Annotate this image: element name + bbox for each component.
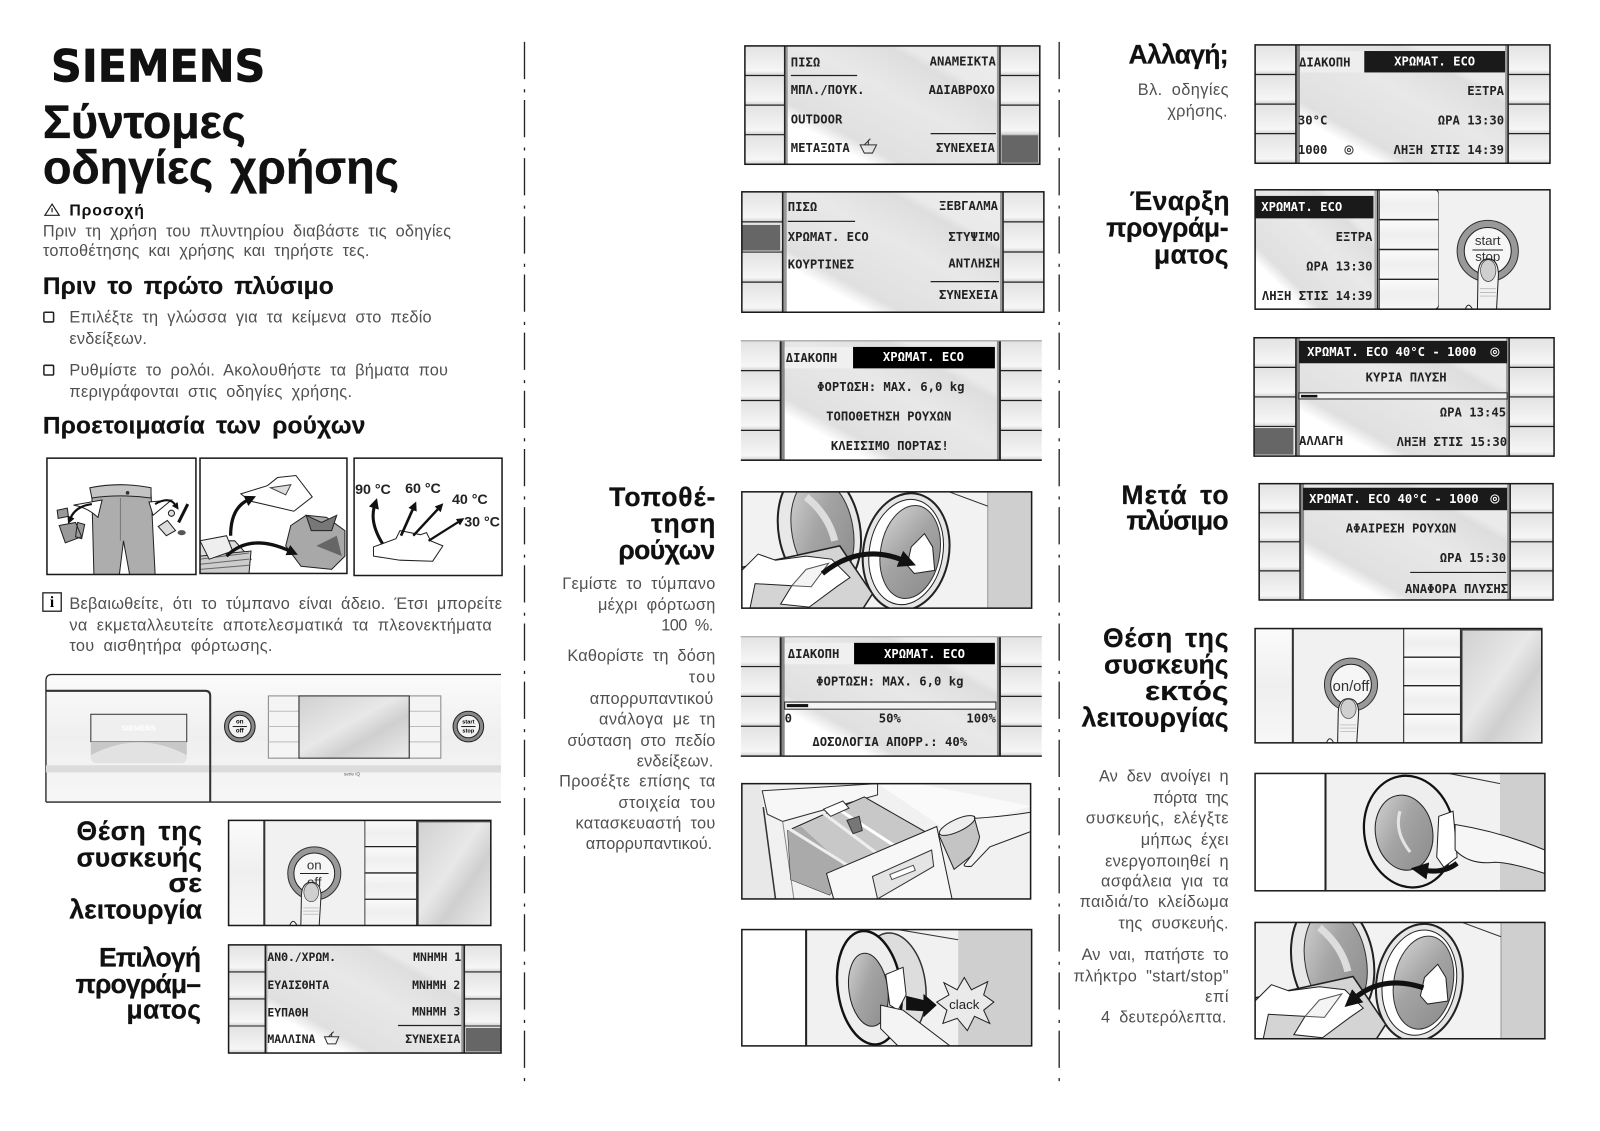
display panel: detergent dosage: 50% xyxy=(879,711,901,725)
icon: warning triangle xyxy=(45,204,59,215)
warning block: Πριν τη χρήση του πλυντηρίου διαβάστε τις οδηγίες xyxy=(43,223,451,241)
text: loading and detergent instructions: ενδείξεων. xyxy=(637,752,713,770)
logo: Siemens: SIEMENS xyxy=(51,40,265,93)
heading: after washing: Μετά το xyxy=(1121,480,1229,510)
display panel: remove clothes: ΑΝΑΦΟΡΑ ΠΛΥΣΗΣ xyxy=(1405,582,1508,596)
heading: loading clothes xyxy=(609,482,715,565)
display panel: load info: ΧΡΩΜΑΤ. ECO xyxy=(883,350,964,364)
icon: spin xyxy=(1491,348,1499,356)
icon: wash basket xyxy=(860,139,877,153)
display panel: detergent dosage: ΦΟΡΤΩΣΗ: MAX. 6,0 kg xyxy=(816,675,963,689)
heading: change: Αλλαγή; xyxy=(1129,39,1229,69)
warning block: τοποθέτησης και χρήσης και τηρήστε τες. xyxy=(43,242,369,260)
heading: switch appliance on: Θέση της xyxy=(77,816,202,846)
heading: switch appliance on: σε xyxy=(168,868,202,898)
heading: start program: ματος xyxy=(1154,239,1229,269)
illustration: closing door, clack xyxy=(742,927,1032,1049)
text: door does not open: ενεργοποιηθεί η xyxy=(1105,852,1229,870)
display panel: program menu 2: ΣΥΝΕΧΕΙΑ xyxy=(936,141,996,155)
heading: loading clothes: ρούχων xyxy=(618,535,715,565)
text: door does not open xyxy=(1073,768,1229,1026)
display panel: main wash progress xyxy=(1254,338,1554,456)
heading: after washing xyxy=(1121,480,1229,536)
heading: switch appliance off: συσκευής xyxy=(1104,649,1229,679)
text: door does not open: πλήκτρο "start/stop" xyxy=(1073,968,1229,986)
illustration: opening door xyxy=(1255,769,1545,895)
heading: start program xyxy=(1106,186,1230,269)
bullet list: first steps: Επιλέξτε τη γλώσσα για τα κείμενα στο πεδίο xyxy=(69,308,432,326)
info note: του αισθητήρα φόρτωσης. xyxy=(69,637,272,655)
display panel: detergent dosage: ΧΡΩΜΑΤ. ECO xyxy=(884,647,965,661)
display panel: change program: ΔΙΑΚΟΠΗ xyxy=(1299,55,1351,69)
heading: start program: Έναρξη xyxy=(1130,186,1230,216)
text: loading and detergent instructions: απορρυπαντικού. xyxy=(586,835,712,853)
illustration: sorting by temperature: 60 °C xyxy=(405,481,441,497)
text: door does not open: μήπως έχει xyxy=(1141,831,1229,849)
display panel: program menu 1: ΜΝΗΜΗ 2 xyxy=(412,978,460,992)
text: loading and detergent instructions: ανάλογα με τη xyxy=(599,710,715,728)
display panel: main wash progress: ΚΥΡΙΑ ΠΛΥΣΗ xyxy=(1366,371,1447,385)
display panel: main wash progress: ΑΛΛΑΓΗ xyxy=(1299,434,1343,448)
text: loading and detergent instructions: 100 %. xyxy=(661,617,713,635)
display panel: program menu 3: ΚΟΥΡΤΙΝΕΣ xyxy=(788,257,854,271)
info note: Βεβαιωθείτε, ότι το τύμπανο είναι άδειο. Έτσι μπορείτε xyxy=(69,595,502,613)
display panel: remove clothes: ΑΦΑΙΡΕΣΗ ΡΟΥΧΩΝ xyxy=(1346,522,1456,536)
text: see instructions: χρήσης. xyxy=(1167,102,1228,120)
text: loading and detergent instructions: Προσέξτε επίσης τα xyxy=(559,773,715,791)
illustration: display with start/stop press: ΩΡΑ 13:30 xyxy=(1306,259,1372,273)
display panel: change program xyxy=(1255,45,1550,163)
display panel: program menu 2: ΜΕΤΑΞΩΤΑ xyxy=(791,141,850,155)
display panel: program menu 3: ΠΙΣΩ xyxy=(788,200,817,214)
display panel: program menu 1: ΑΝΘ./ΧΡΩΜ. xyxy=(267,950,336,964)
text: loading and detergent instructions: κατασκευαστή του xyxy=(576,815,715,833)
progress bar xyxy=(1299,393,1507,399)
soap drawer handle: SIEMENS xyxy=(122,724,156,733)
display panel: detergent dosage: ΔΙΑΚΟΠΗ xyxy=(788,647,839,661)
load bar xyxy=(785,702,996,709)
display panel: change program: ΩΡΑ 13:30 xyxy=(1438,113,1504,127)
on/off knob: off xyxy=(236,728,245,735)
display panel: program menu 1: ΜΝΗΜΗ 1 xyxy=(413,950,461,964)
display panel: program menu 2: ΑΝΑΜΕΙΚΤΑ xyxy=(930,54,997,68)
text: loading and detergent instructions: απορρυπαντικού xyxy=(590,690,713,708)
display panel: load info xyxy=(741,341,1042,460)
start/stop knob: start xyxy=(462,719,475,725)
illustration: sorting by temperature: 30 °C xyxy=(464,515,500,531)
text: see instructions xyxy=(1138,81,1229,120)
illustration: unloading laundry xyxy=(1254,922,1546,1040)
illustration: display with start/stop press: ΕΞΤΡΑ xyxy=(1336,230,1373,244)
text: door does not open: πόρτα της xyxy=(1153,789,1229,807)
illustration: on/off button press off: on/off xyxy=(1333,679,1370,695)
display panel: detergent dosage xyxy=(741,637,1042,756)
illustration: detergent drawer xyxy=(742,784,1031,899)
bullet list: first steps xyxy=(44,308,448,401)
start/stop knob: stop xyxy=(462,729,475,735)
warning block: Προσοχή xyxy=(69,202,144,219)
icon: spin xyxy=(1491,495,1499,503)
bullet list: first steps: Ρυθμίστε το ρολόι. Ακολουθήστε τα βήματα που xyxy=(69,362,448,380)
text: door does not open: Αν δεν ανοίγει η xyxy=(1099,768,1229,786)
display panel: load info: ΔΙΑΚΟΠΗ xyxy=(786,351,837,365)
bullet list: first steps: ενδείξεων. xyxy=(69,330,147,348)
text: loading and detergent instructions: σύσταση στο πεδίο xyxy=(567,732,715,750)
dividers xyxy=(524,42,1059,1085)
illustration: sorting by temperature: 90 °C xyxy=(355,482,391,498)
display panel: program menu 2: ΜΠΛ./ΠΟΥΚ. xyxy=(791,83,864,97)
illustration: emptying pockets xyxy=(47,458,196,574)
display panel: change program: ΕΞΤΡΑ xyxy=(1467,84,1505,98)
display panel: program menu 2: OUTDOOR xyxy=(791,112,843,126)
display panel: main wash progress: ΩΡΑ 13:45 xyxy=(1440,405,1506,419)
callout: clack xyxy=(937,978,994,1031)
display panel: program menu 3 xyxy=(742,192,1044,312)
heading: before first wash: Πριν το πρώτο πλύσιμο xyxy=(43,273,334,300)
illustration: display with start/stop press: start xyxy=(1475,233,1501,248)
info note xyxy=(43,593,502,655)
heading: switch appliance off xyxy=(1082,623,1229,733)
heading: switch appliance on: συσκευής xyxy=(77,842,202,872)
warning block xyxy=(43,202,451,260)
heading: switch appliance off: λειτουργίας xyxy=(1082,703,1229,733)
display panel: program menu 2: ΠΙΣΩ xyxy=(791,55,820,69)
display panel: load info: ΦΟΡΤΩΣΗ: MAX. 6,0 kg xyxy=(817,380,964,394)
display xyxy=(268,696,441,758)
display panel: remove clothes xyxy=(1259,484,1553,600)
heading: switch appliance off: Θέση της xyxy=(1103,623,1229,653)
display panel: change program: 30°C xyxy=(1298,113,1327,127)
callout: clack: clack xyxy=(949,997,980,1012)
on/off knob xyxy=(225,711,255,742)
illustration: sorting by temperature: 40 °C xyxy=(452,492,488,508)
text: door does not open: Αν ναι, πατήστε το xyxy=(1082,946,1229,964)
display panel: program menu 3: ΣΤΥΨΙΜΟ xyxy=(948,230,1000,244)
heading: program selection: ματος xyxy=(127,994,201,1024)
text: door does not open: επί xyxy=(1205,988,1229,1006)
display panel: load info: ΤΟΠΟΘΕΤΗΣΗ ΡΟΥΧΩΝ xyxy=(826,409,951,423)
heading: program selection xyxy=(76,942,201,1024)
display panel: program menu 1 xyxy=(229,945,501,1053)
text: loading and detergent instructions: στοιχεία του xyxy=(618,794,715,812)
display panel: program menu 3: ΑΝΤΛΗΣΗ xyxy=(948,256,1000,270)
heading: after washing: πλύσιμο xyxy=(1127,506,1229,536)
heading: switch appliance on: λειτουργία xyxy=(69,894,203,924)
bullet list: first steps: περιγράφονται στις οδηγίες χρήσης. xyxy=(69,383,352,401)
text: loading and detergent instructions: του xyxy=(689,669,715,687)
display panel: remove clothes: ΧΡΩΜΑΤ. ECO 40°C - 1000 xyxy=(1309,492,1479,506)
illustration: sorting laundry xyxy=(200,458,347,587)
illustration: display with start/stop press: ΧΡΩΜΑΤ. ECO xyxy=(1261,200,1342,214)
display panel: detergent dosage: 100% xyxy=(966,711,997,725)
icon: spin xyxy=(1345,146,1353,154)
text: door does not open: συσκευής, ελέγξτε xyxy=(1086,809,1229,827)
illustration: on/off button press xyxy=(229,820,491,925)
title xyxy=(43,96,399,194)
display panel: program menu 1: ΣΥΝΕΧΕΙΑ xyxy=(405,1032,460,1046)
text: loading and detergent instructions: μέχρι φόρτωση xyxy=(598,596,715,614)
display panel: program menu 1: ΜΝΗΜΗ 3 xyxy=(412,1004,460,1018)
text: door does not open: ασφάλεια για τα xyxy=(1101,873,1229,891)
text: loading and detergent instructions xyxy=(559,575,715,853)
display panel: program menu 1: ΕΥΑΙΣΘΗΤΑ xyxy=(267,978,329,992)
heading: start program: προγράμ- xyxy=(1106,213,1229,243)
illustration: display with start/stop press: ΛΗΞΗ ΣΤΙΣ 14:39 xyxy=(1262,289,1372,303)
display panel: change program: 1000 xyxy=(1298,143,1327,157)
text: loading and detergent instructions: Καθορίστε τη δόση xyxy=(567,647,715,665)
text: loading and detergent instructions: Γεμίστε το τύμπανο xyxy=(562,575,715,593)
display panel: program menu 2: ΑΔΙΑΒΡΟΧΟ xyxy=(929,83,995,97)
info note: να εκμεταλλευτείτε αποτελεσματικά τα πλεονεκτήματα xyxy=(69,617,492,635)
illustration: sorting by temperature xyxy=(354,458,502,575)
display panel: detergent dosage: 0 xyxy=(785,711,792,725)
title: οδηγίες χρήσης xyxy=(43,142,399,194)
display panel: program menu 1: ΜΑΛΛΙΝΑ xyxy=(267,1032,316,1046)
heading: program selection: προγράμ– xyxy=(76,969,201,999)
illustration: display with start/stop press xyxy=(1255,190,1550,309)
icon: info: i xyxy=(50,594,55,611)
illustration: display with start/stop press: stop xyxy=(1475,249,1500,264)
display panel: load info: ΚΛΕΙΣΙΜΟ ΠΟΡΤΑΣ! xyxy=(831,439,949,453)
display panel: program menu 3: ΣΥΝΕΧΕΙΑ xyxy=(939,288,999,302)
heading: preparing clothes: Προετοιμασία των ρούχων xyxy=(43,413,365,440)
heading: switch appliance off: εκτός xyxy=(1145,676,1229,706)
text: see instructions: Βλ. οδηγίες xyxy=(1138,81,1229,99)
display panel: change program: ΧΡΩΜΑΤ. ECO xyxy=(1394,54,1475,68)
illustration: control panel overview: serie IQ xyxy=(344,771,361,776)
heading: program selection: Επιλογή xyxy=(99,942,201,972)
display panel: change program: ΛΗΞΗ ΣΤΙΣ 14:39 xyxy=(1394,143,1504,157)
text: door does not open: παιδιά/το κλείδωμα xyxy=(1080,893,1229,911)
on/off knob: on xyxy=(236,718,244,725)
heading: switch appliance on xyxy=(69,816,203,924)
text: door does not open: 4 δευτερόλεπτα. xyxy=(1101,1008,1227,1026)
display panel: main wash progress: ΛΗΞΗ ΣΤΙΣ 15:30 xyxy=(1397,435,1507,449)
icon: info xyxy=(43,593,61,611)
display panel: remove clothes: ΩΡΑ 15:30 xyxy=(1440,551,1506,565)
display panel: program menu 3: ΞΕΒΓΑΛΜΑ xyxy=(939,199,999,213)
illustration: loading laundry into drum xyxy=(741,491,1032,609)
display panel: main wash progress: ΧΡΩΜΑΤ. ECO 40°C - 1000 xyxy=(1307,345,1477,359)
display panel: program menu 2 xyxy=(745,46,1040,164)
heading: loading clothes: Τοποθέ- xyxy=(609,482,715,512)
display panel: program menu 1: ΕΥΠΑΘΗ xyxy=(267,1005,309,1019)
illustration: on/off button press off xyxy=(1255,629,1542,743)
icon: wash basket xyxy=(324,1032,339,1044)
illustration: on/off button press: on xyxy=(307,857,322,872)
soap drawer handle xyxy=(91,714,187,763)
illustration: control panel overview xyxy=(46,674,501,802)
illustration: on/off button press: off xyxy=(307,875,322,890)
heading: loading clothes: τηση xyxy=(651,509,715,539)
title: Σύντομες xyxy=(43,96,246,148)
display panel: program menu 3: ΧΡΩΜΑΤ. ECO xyxy=(788,230,869,244)
display panel: detergent dosage: ΔΟΣΟΛΟΓΙΑ ΑΠΟΡΡ.: 40% xyxy=(812,735,968,749)
start/stop knob xyxy=(453,711,484,742)
text: door does not open: της συσκευής. xyxy=(1118,915,1229,933)
